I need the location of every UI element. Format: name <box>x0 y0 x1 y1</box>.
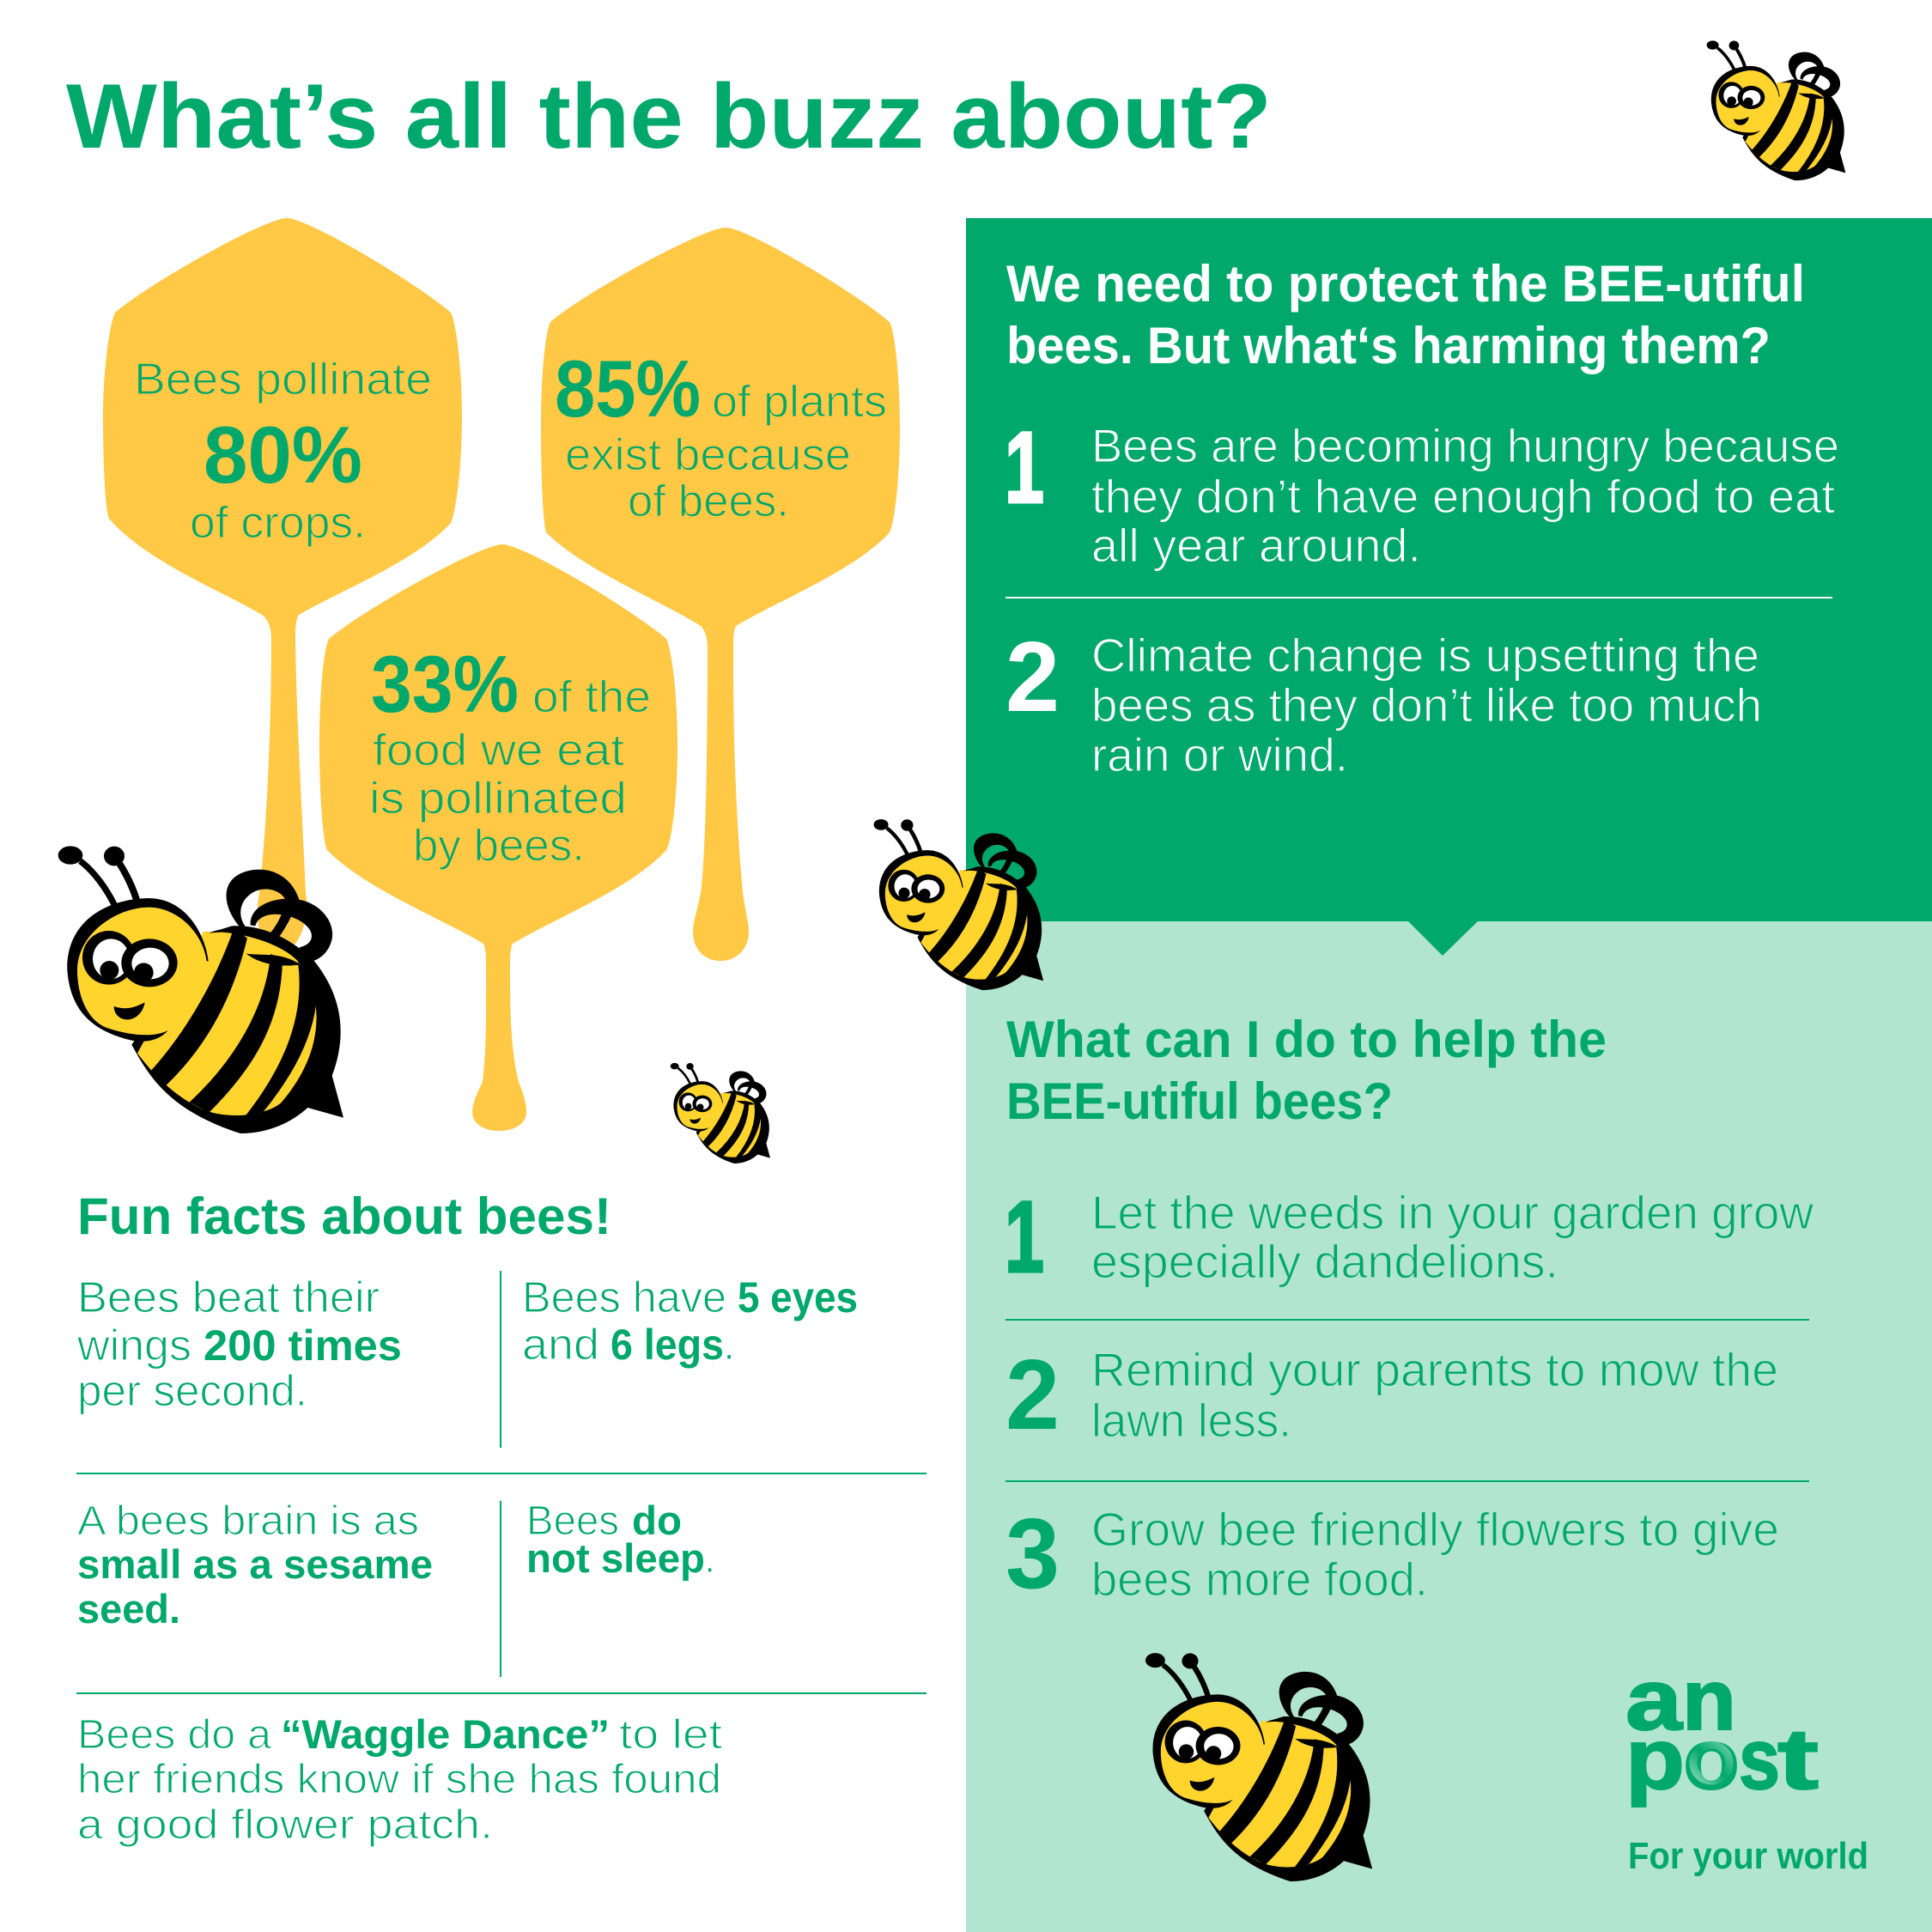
stat text: 33%: is pollinated <box>369 774 627 823</box>
stat text: 33%: by bees. <box>413 821 585 871</box>
fact: waggle dance <box>77 1711 722 1848</box>
panel: what can I do <box>966 920 1932 1932</box>
logo: An Post: n <box>1682 1652 1736 1748</box>
fact: brain: small as a sesame <box>77 1541 433 1587</box>
heading: what can I do: BEE-utiful bees? <box>1006 1072 1393 1130</box>
fact: sleep: not sleep <box>526 1535 705 1581</box>
title: What’s all the buzz about? <box>66 64 1272 167</box>
stat text: 80%: 80% <box>204 410 362 500</box>
fact: wing beats: wings <box>76 1321 191 1370</box>
stat text: 80%: Bees pollinate <box>134 355 432 404</box>
heading: harming bees <box>1006 255 1805 374</box>
text block: mow <box>1091 1343 1778 1447</box>
logo: An Post: o <box>1683 1711 1740 1807</box>
text block: mow: Remind your parents to mow the <box>1091 1343 1778 1396</box>
fact: waggle dance: a good flower patch. <box>77 1802 493 1848</box>
fact: waggle dance: Bees do a <box>77 1712 271 1758</box>
text block: hungry bees: all year around. <box>1091 519 1421 572</box>
heading: fun facts: Fun facts about bees! <box>77 1188 611 1245</box>
text block: flowers: Grow bee friendly flowers to give <box>1091 1503 1779 1556</box>
number 2: 2 <box>1005 621 1060 732</box>
fact: wing beats: Bees beat their <box>77 1273 380 1321</box>
fact: sleep <box>526 1498 715 1582</box>
text block: hungry bees: Bees are becoming hungry because <box>1091 419 1839 472</box>
text block: hungry bees <box>1091 419 1839 572</box>
text block: climate change: rain or wind. <box>1091 728 1348 781</box>
text block: climate change <box>1091 629 1762 781</box>
fact: eyes and legs: . <box>723 1320 735 1369</box>
text block: climate change: bees as they don’t like too much <box>1091 678 1762 732</box>
fact: eyes and legs: 6 legs <box>611 1321 724 1369</box>
heading: harming bees: bees. But what‘s harming them? <box>1006 317 1771 374</box>
stat text: 33%: food we eat <box>373 726 625 775</box>
fact: eyes and legs: 5 eyes <box>738 1273 858 1321</box>
fact: brain: seed. <box>77 1586 180 1631</box>
logo: An Post: t <box>1777 1711 1819 1807</box>
heading: what can I do <box>1006 1011 1607 1130</box>
text block: flowers <box>1091 1503 1779 1606</box>
text block: mow: lawn less. <box>1091 1394 1291 1447</box>
tagline: For your world <box>1628 1835 1868 1877</box>
stat text: 33%: 33% <box>371 639 519 729</box>
fact: sleep: . <box>704 1536 715 1582</box>
stat text: 85%: of plants <box>712 377 887 427</box>
heading: what can I do: What can I do to help the <box>1006 1011 1607 1068</box>
text block: weeds: especially dandelions. <box>1091 1235 1558 1288</box>
number 1: 1 <box>1005 1181 1044 1294</box>
fact: eyes and legs: and <box>522 1320 599 1369</box>
text block: flowers: bees more food. <box>1091 1552 1428 1606</box>
stat text: 80% <box>134 355 432 548</box>
icon: bee top right <box>1707 40 1845 180</box>
arrow: pointer from green panel <box>1407 920 1479 956</box>
heading: harming bees: We need to protect the BEE-utiful <box>1006 255 1805 313</box>
fact: eyes and legs <box>522 1273 858 1369</box>
icon: bee on panel edge <box>874 819 1043 990</box>
stat text: 85%: exist because <box>565 430 851 480</box>
stat text: 33%: of the <box>532 672 651 722</box>
stat text: 33% <box>369 639 651 871</box>
fact: wing beats: 200 times <box>204 1321 402 1370</box>
fact: sleep: Bees <box>526 1498 619 1544</box>
text block: weeds: Let the weeds in your garden grow <box>1091 1186 1814 1239</box>
stat text: 80%: of crops. <box>190 498 366 548</box>
logo: An Post: s <box>1739 1711 1780 1807</box>
text block: hungry bees: they don’t have enough food to eat <box>1091 470 1835 523</box>
text block: weeds <box>1091 1186 1814 1288</box>
text block: climate change: Climate change is upsetting the <box>1091 629 1759 682</box>
icon: large bee left <box>58 846 343 1133</box>
honeycomb drip: 80% of crops <box>103 218 462 953</box>
honeycomb drip: 33% of food <box>319 544 677 1131</box>
fact: waggle dance: to let <box>619 1712 722 1758</box>
fact: waggle dance: her friends know if she has found <box>77 1757 721 1802</box>
panel: fun facts <box>76 1188 927 1848</box>
panel: what is harming bees <box>966 218 1932 921</box>
logo: An Post <box>1625 1652 1868 1877</box>
stat text: 85%: 85% <box>555 343 701 434</box>
fact: wing beats: per second. <box>77 1366 307 1415</box>
number 2: 2 <box>1005 1339 1060 1450</box>
stat text: 85% <box>555 343 887 526</box>
logo: An Post: p <box>1625 1711 1685 1807</box>
icon: small bee <box>671 1063 770 1163</box>
fact: waggle dance: “Waggle Dance” <box>281 1711 610 1757</box>
icon: bee bottom <box>1145 1653 1372 1881</box>
fact: brain <box>77 1498 433 1631</box>
honeycomb drip: 85% of plants <box>541 228 900 961</box>
fact: sleep: do <box>632 1498 682 1543</box>
number 3: 3 <box>1005 1498 1060 1609</box>
fact: brain: A bees brain is as <box>77 1498 419 1544</box>
fact: eyes and legs: Bees have <box>522 1273 726 1321</box>
stat text: 85%: of bees. <box>628 477 789 526</box>
number 1: 1 <box>1005 411 1044 525</box>
fact: wing beats <box>76 1273 402 1415</box>
logo: An Post: a <box>1625 1652 1684 1748</box>
